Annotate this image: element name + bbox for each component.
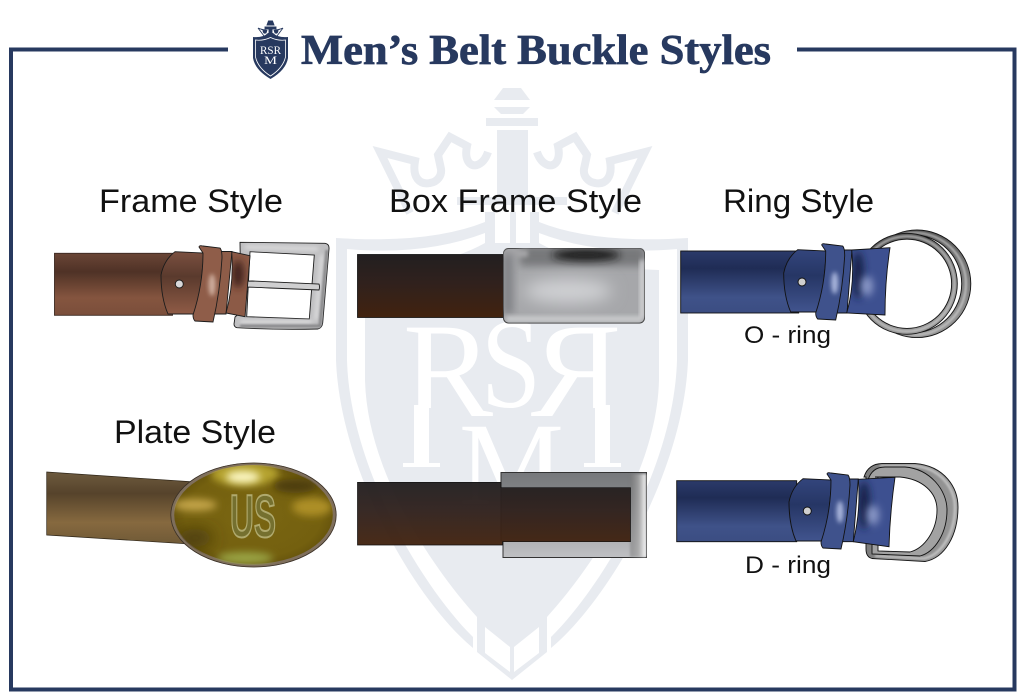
belt: plate style bbox=[47, 462, 336, 567]
watermark: RSM shield crest bbox=[336, 88, 688, 680]
logo shield inner line bbox=[256, 38, 286, 76]
logo sword and crown bbox=[258, 21, 283, 41]
frame buckle shading bbox=[240, 247, 327, 326]
belt: frame style bbox=[54, 242, 329, 329]
label: D - ring: D - ring bbox=[745, 552, 831, 579]
plate strap bbox=[47, 472, 195, 544]
watermark crown bbox=[380, 137, 645, 213]
O-ring front ring bbox=[856, 233, 957, 334]
O-ring front ring highlight bbox=[860, 236, 954, 331]
frame stud hole bbox=[175, 280, 183, 288]
open frame strap bbox=[358, 482, 630, 545]
open frame metal bbox=[501, 472, 646, 558]
frame keeper bbox=[193, 246, 222, 322]
D-ring keeper gap bbox=[840, 479, 858, 542]
frame buckle bbox=[234, 242, 329, 329]
logo monogram bbox=[260, 43, 281, 67]
watermark shield body bbox=[365, 212, 659, 680]
heading: Frame Style: Frame Style bbox=[99, 183, 283, 219]
plate oval outer line bbox=[171, 463, 336, 567]
plate oval buckle bbox=[172, 464, 334, 566]
label: O - ring: O - ring bbox=[744, 322, 831, 349]
monogram serif covers bbox=[400, 408, 625, 420]
watermark monogram bbox=[400, 293, 625, 530]
D-ring strap bbox=[677, 481, 797, 542]
O-ring fold shading bbox=[852, 251, 873, 299]
belt: D-ring bbox=[677, 464, 958, 562]
plate engraving US: US bbox=[230, 483, 276, 550]
open frame highlight bbox=[630, 474, 646, 557]
belt: O-ring bbox=[681, 230, 971, 338]
heading: Plate Style: Plate Style bbox=[114, 414, 276, 450]
box frame plate bbox=[504, 248, 644, 323]
D-ring keeper highlight bbox=[836, 501, 844, 523]
O-ring tab bbox=[784, 250, 827, 312]
watermark monogram: S bbox=[481, 293, 541, 435]
crown left half bbox=[380, 137, 488, 213]
O-ring keeper bbox=[816, 244, 845, 320]
heading: Ring Style: Ring Style bbox=[723, 183, 874, 219]
D-ring fold-over bbox=[853, 477, 895, 547]
title: Men’s Belt Buckle Styles bbox=[301, 28, 771, 74]
logo monogram: M bbox=[264, 53, 277, 67]
D-ring front ring bbox=[868, 467, 947, 556]
logo: RSM crest bbox=[253, 21, 288, 79]
O-ring gap between rings bbox=[864, 235, 962, 333]
box frame plate shading bbox=[503, 246, 645, 322]
belt: box frame style bbox=[358, 246, 645, 323]
logo monogram: RSR bbox=[260, 43, 281, 57]
plate reflections bbox=[173, 462, 332, 564]
D-ring tab bbox=[789, 479, 832, 541]
D-ring fold shading bbox=[858, 481, 879, 529]
O-ring stud hole bbox=[798, 278, 806, 286]
O-ring strap bbox=[681, 251, 799, 313]
watermark monogram: R bbox=[403, 297, 493, 446]
frame strap bbox=[54, 253, 172, 315]
box frame strap bbox=[358, 254, 504, 318]
crown right half bbox=[537, 137, 645, 213]
frame tab and keeper bbox=[161, 246, 222, 322]
watermark sword bbox=[457, 88, 567, 205]
frame fold shading bbox=[232, 260, 244, 288]
frame keeper gap bbox=[212, 252, 232, 314]
D-ring rear ring bbox=[864, 464, 958, 562]
frame tab bbox=[161, 252, 204, 314]
D-ring keeper bbox=[821, 473, 850, 549]
O-ring rear ring bbox=[863, 230, 971, 338]
D-ring tab and keeper bbox=[789, 473, 850, 549]
frame fold-over bbox=[226, 252, 250, 317]
O-ring keeper highlight bbox=[831, 272, 838, 294]
watermark monogram: M bbox=[459, 399, 564, 530]
watermark shield tip cutouts bbox=[485, 627, 539, 672]
D-ring rear highlight bbox=[875, 466, 955, 558]
heading: Box Frame Style: Box Frame Style bbox=[389, 183, 642, 219]
D-ring stud hole bbox=[803, 507, 811, 515]
O-ring tab and keeper bbox=[784, 244, 845, 320]
O-ring opening bbox=[862, 239, 952, 328]
O-ring fold-over bbox=[847, 248, 890, 315]
frame keeper highlight bbox=[208, 274, 216, 296]
watermark shield band bbox=[336, 222, 688, 648]
O-ring keeper gap bbox=[835, 250, 852, 313]
O-ring rear ring highlight bbox=[864, 233, 966, 335]
watermark monogram: R bbox=[531, 297, 621, 446]
logo shield bbox=[253, 33, 288, 79]
D-ring opening bbox=[875, 477, 937, 552]
belt: open box frame bbox=[358, 472, 646, 558]
frame buckle pin bbox=[239, 281, 320, 290]
